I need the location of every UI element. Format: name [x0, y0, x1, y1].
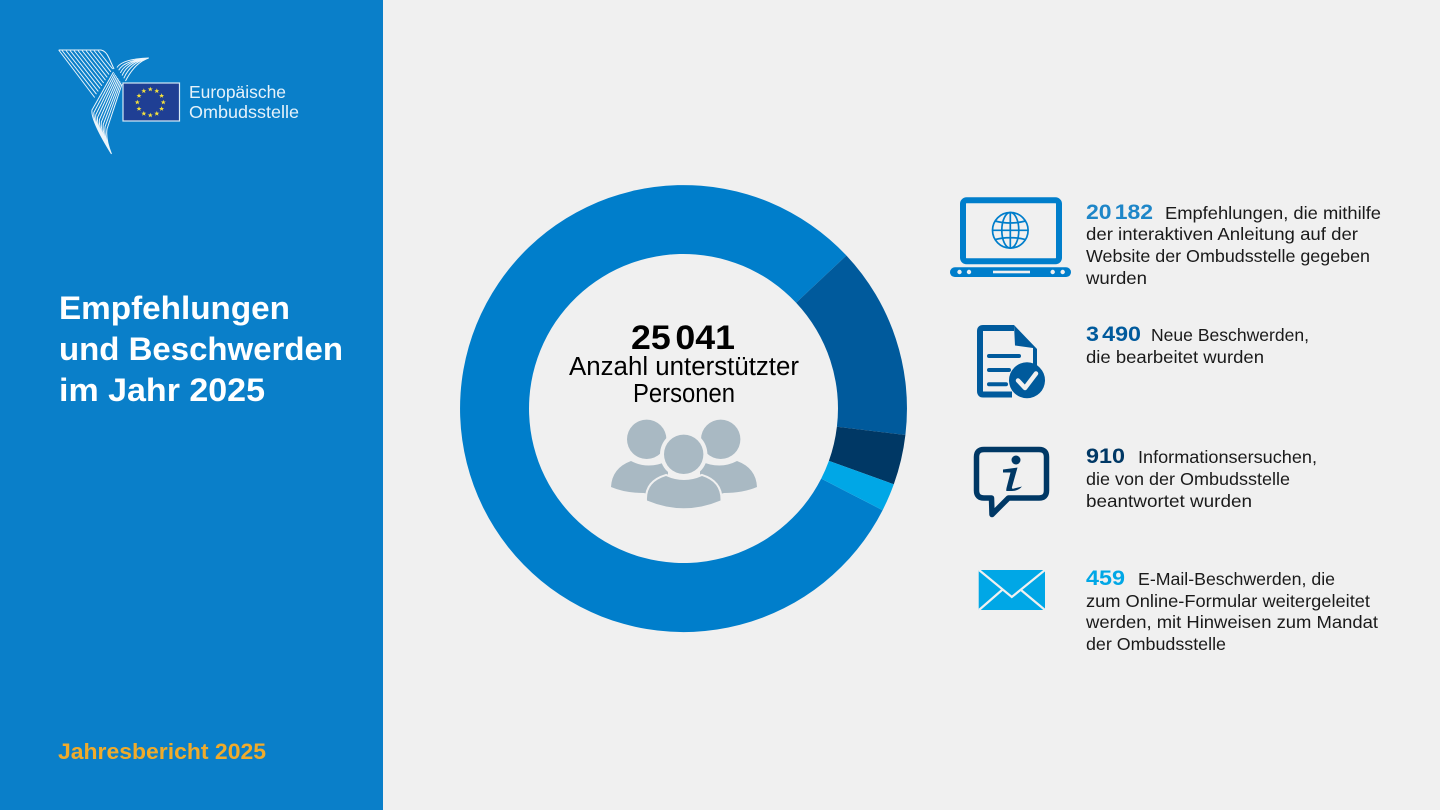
text: e-mail complaints: zum Online-Formular weitergeleitet	[1086, 591, 1370, 611]
text: information requests: Informationsersuchen,	[1138, 447, 1317, 467]
segment: new complaints 3 490	[796, 256, 907, 435]
text: new complaints	[1086, 322, 1309, 367]
logo wordmark: Ombudsstelle	[189, 102, 299, 122]
text: recommendations: der interaktiven Anleitung auf der	[1086, 224, 1358, 244]
title: im Jahr 2025	[59, 372, 265, 408]
text: information requests: beantwortet wurden	[1086, 491, 1252, 511]
title: und Beschwerden	[59, 331, 343, 367]
donut centre total	[569, 319, 800, 408]
donut centre total: 25 041	[631, 319, 735, 357]
text: e-mail complaints: der Ombudsstelle	[1086, 634, 1226, 654]
text: recommendations: Website der Ombudsstelle gegeben	[1086, 246, 1370, 266]
text: recommendations: Empfehlungen, die mithilfe	[1165, 203, 1381, 223]
icon: envelope	[979, 570, 1045, 610]
icon: laptop with globe	[950, 200, 1071, 277]
text: recommendations	[1085, 200, 1381, 288]
logo wordmark: Europäische	[189, 82, 286, 102]
text: e-mail complaints: werden, mit Hinweisen zum Mandat	[1085, 612, 1378, 632]
title	[59, 290, 343, 408]
text: e-mail complaints: E-Mail-Beschwerden, die	[1138, 569, 1335, 589]
report label: Jahresbericht 2025	[58, 739, 266, 764]
donut centre total: Anzahl unterstützter	[569, 353, 800, 381]
text: information requests: die von der Ombudsstelle	[1086, 469, 1290, 489]
flag	[123, 83, 180, 121]
title: Empfehlungen	[59, 290, 290, 326]
logo: European Ombudsman	[59, 50, 299, 154]
icon: document with check	[980, 325, 1045, 398]
text: e-mail complaints	[1085, 566, 1378, 654]
icon: information speech bubble	[976, 450, 1046, 514]
logo wordmark	[189, 82, 299, 122]
text: e-mail complaints: 459	[1086, 566, 1125, 590]
icon: people	[611, 420, 757, 508]
text: recommendations: 20 182	[1086, 200, 1153, 224]
segment: recommendations 20 182	[460, 185, 883, 632]
text: new complaints: die bearbeitet wurden	[1086, 347, 1264, 367]
text: new complaints: 3 490	[1086, 322, 1141, 346]
segment: information requests 910	[829, 427, 905, 484]
text: information requests	[1086, 444, 1317, 511]
text: new complaints: Neue Beschwerden,	[1151, 325, 1309, 345]
donut centre total: Personen	[633, 380, 735, 408]
text: information requests: 910	[1086, 444, 1125, 468]
segment: e-mail complaints 459	[821, 461, 894, 510]
text: recommendations: wurden	[1085, 268, 1147, 288]
donut chart	[460, 185, 907, 632]
panel: blue sidebar	[0, 0, 383, 810]
